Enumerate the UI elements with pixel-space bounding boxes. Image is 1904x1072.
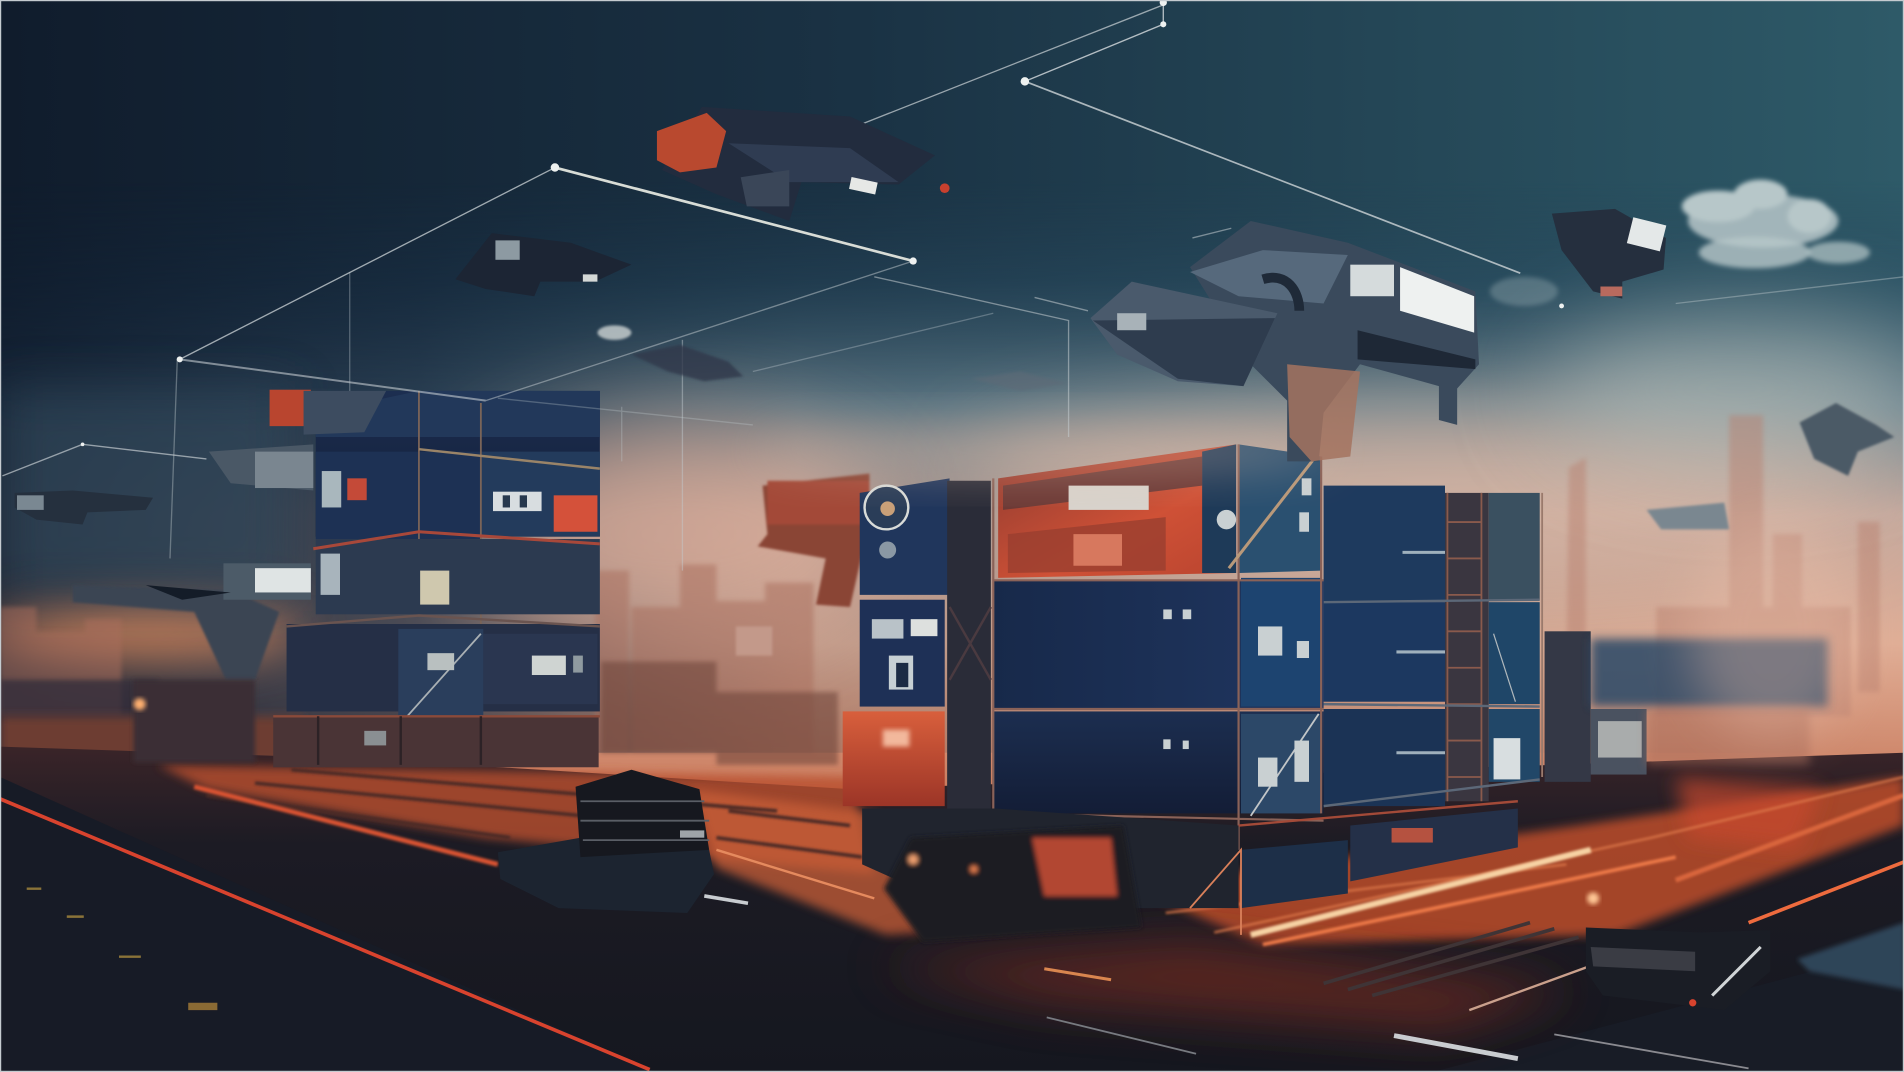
red upper panel [998,444,1236,578]
lower large container [993,711,1324,813]
central background crane (red) [736,473,869,656]
drone: hazy far right [1647,403,1894,529]
main container stack [843,444,1542,935]
frame lines [993,444,1324,850]
front left column [843,478,991,826]
clouds [1490,180,1870,306]
truck: centre left [498,770,748,913]
left dock crane structure [73,563,311,762]
drone: large red nose [657,107,950,221]
haze over horizon [753,427,1858,741]
network nodes [81,0,1564,446]
drone: small upper left [455,233,631,296]
truck: lower right [1586,892,1770,1010]
drone: centre hazy [597,325,1069,391]
upper right panel [1239,444,1321,573]
distant city skyline [0,415,1880,765]
base containers [862,809,1239,908]
container labels [321,471,597,745]
truck: centre foreground blurred [884,826,1141,942]
left container stack [273,391,600,767]
large floating cargo ship [1090,221,1479,461]
sky background [1,1,1903,789]
rear right block [1324,486,1542,806]
small tags [1163,478,1311,787]
orange light trails [0,765,1904,1070]
network lines [2,0,1904,571]
right warehouse containers [1545,631,1828,782]
ground and road [0,747,1904,1072]
red crane module above left stack [209,390,386,490]
drone: far left [15,490,153,524]
middle large container [993,580,1324,709]
drone: upper right [1552,209,1666,299]
